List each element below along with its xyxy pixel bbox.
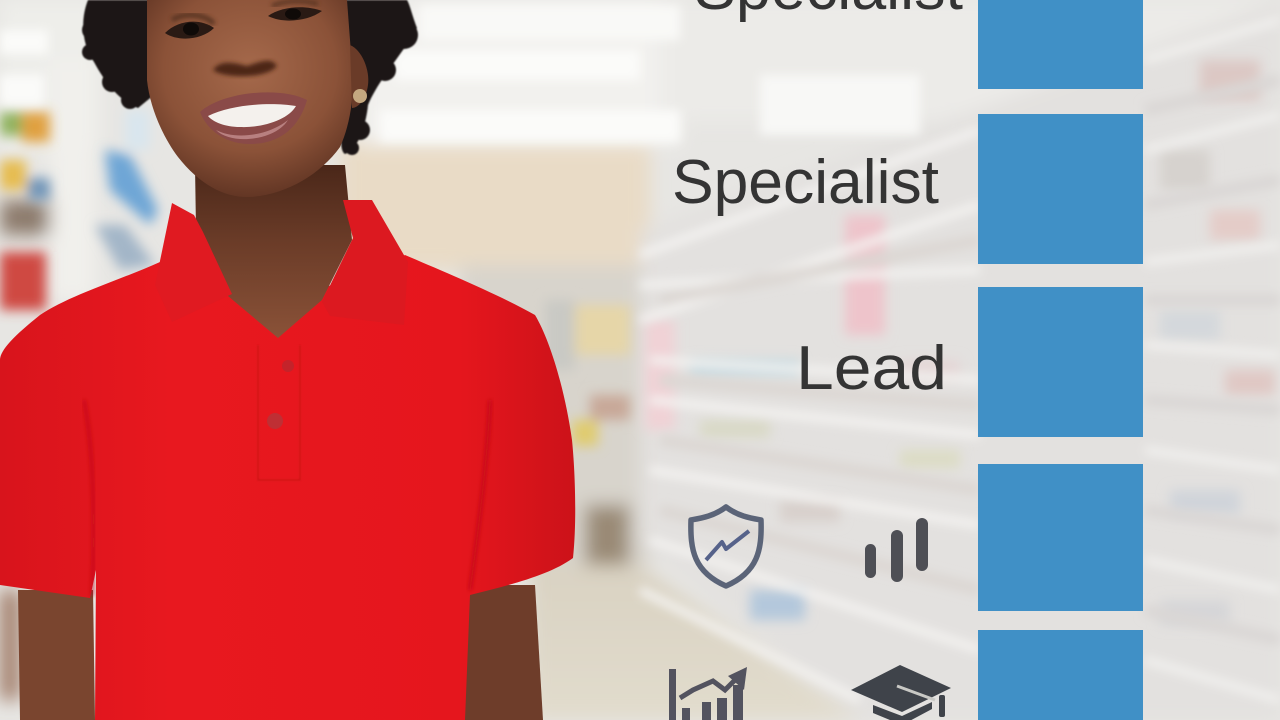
label: Specialist: Specialist [672, 148, 939, 217]
collar [155, 203, 232, 322]
person in red polo [0, 0, 575, 720]
rung 4 [978, 464, 1143, 611]
icon: graduation cap [851, 665, 951, 720]
neck [195, 165, 352, 338]
icon: growth chart [669, 667, 747, 720]
icon: signal bars [865, 518, 928, 582]
sleeve shadows [84, 400, 94, 596]
face [147, 0, 353, 197]
earring [353, 89, 367, 103]
nose shading [213, 61, 277, 76]
shirt body [0, 255, 575, 720]
placket [258, 345, 300, 480]
blue ladder column [978, 0, 1143, 720]
buttons [267, 413, 283, 429]
label: Lead: Lead [796, 334, 947, 403]
rung 1 [978, 0, 1143, 89]
rung 2 [978, 114, 1143, 264]
eyes [165, 1, 322, 39]
ear [350, 45, 368, 108]
icon: shield with check [691, 507, 761, 586]
rung 3 [978, 287, 1143, 437]
arms [18, 590, 95, 720]
hair [82, 0, 418, 155]
mouth [200, 92, 307, 144]
rung 5 [978, 630, 1143, 720]
